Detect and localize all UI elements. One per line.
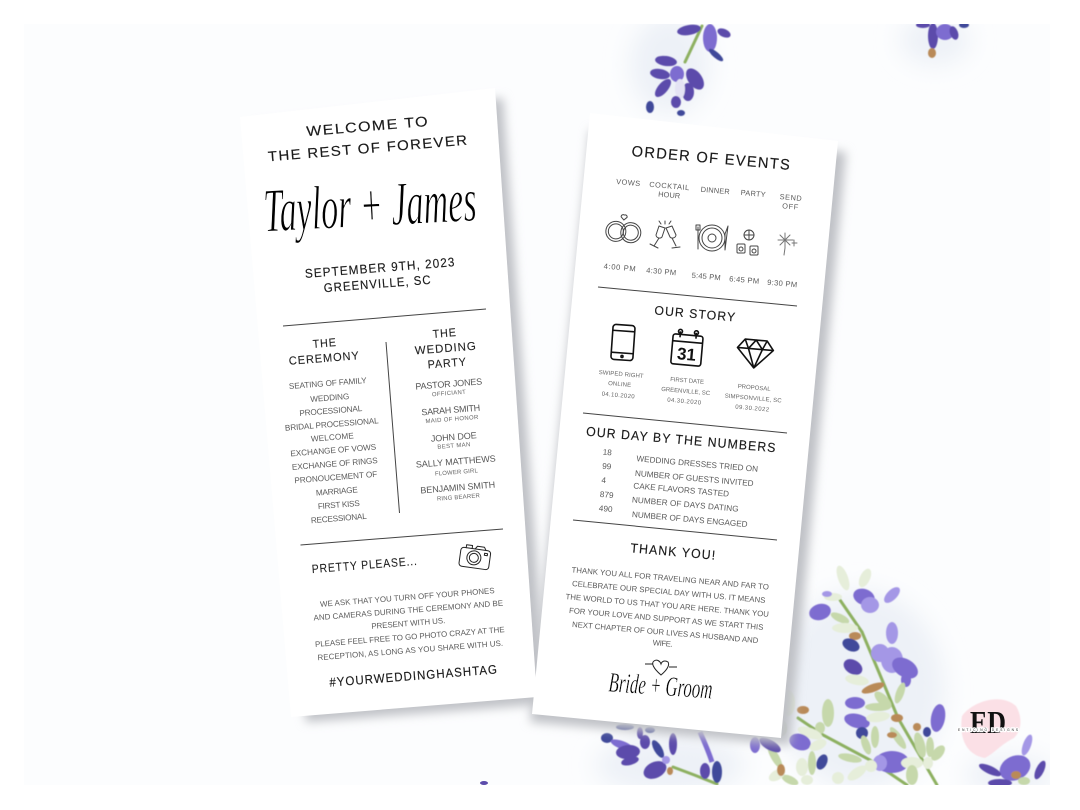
wedding party names: MAID OF HONOR — [425, 415, 479, 425]
ceremony heading: CEREMONY — [288, 350, 360, 368]
event labels: VOWS — [616, 177, 641, 188]
numbers list: NUMBER OF DAYS DATING — [632, 495, 739, 514]
event labels: PARTY — [740, 188, 766, 199]
welcome heading — [267, 113, 469, 164]
wedding party heading: PARTY — [427, 356, 467, 372]
wedding party names: SARAH SMITH — [421, 403, 481, 417]
ceremony schedule — [285, 376, 379, 525]
ceremony schedule: MARRIAGE — [316, 485, 359, 498]
date and place — [304, 255, 456, 295]
icon: champagne toast — [650, 221, 680, 248]
wedding party names: BENJAMIN SMITH — [420, 480, 496, 495]
ceremony schedule: EXCHANGE OF VOWS — [290, 443, 377, 458]
logo pink blob — [961, 699, 1020, 758]
ceremony schedule: SEATING OF FAMILY — [289, 376, 368, 391]
wedding party names: SALLY MATTHEWS — [415, 453, 496, 470]
hashtag: #YOURWEDDINGHASHTAG — [329, 662, 498, 690]
heading: thank you: THANK YOU! — [630, 540, 717, 563]
icon: camera — [459, 544, 491, 570]
ceremony schedule: EXCHANGE OF RINGS — [292, 456, 379, 472]
logo small caption: ENTICING DESIGNS — [958, 728, 1018, 732]
wedding party heading: WEDDING — [414, 341, 477, 357]
card sheet — [532, 113, 838, 738]
upper blossoms — [836, 566, 850, 590]
ceremony schedule: BRIDAL PROCESSIONAL — [285, 416, 379, 433]
lavender top left — [646, 23, 732, 116]
ceremony schedule: FIRST KISS — [318, 499, 361, 511]
event labels: COCKTAIL — [649, 180, 690, 192]
story captions: SIMPSONVILLE, SC — [724, 394, 782, 405]
request paragraph — [313, 586, 505, 662]
wedding party names: RING BEARER — [437, 493, 481, 503]
event times: 6:45 PM — [729, 274, 760, 286]
event labels: SEND — [779, 192, 802, 203]
ceremony heading — [288, 337, 360, 368]
heading: order of events: ORDER OF EVENTS — [631, 143, 792, 174]
ceremony schedule: WELCOME — [311, 431, 355, 444]
story captions — [598, 370, 782, 414]
event labels — [616, 177, 802, 212]
icon: heart flourish — [645, 660, 677, 675]
ceremony schedule: PROCESSIONAL — [299, 404, 363, 418]
wedding party names: PASTOR JONES — [415, 376, 483, 392]
request paragraph: AND CAMERAS DURING THE CEREMONY AND BE — [313, 599, 503, 622]
wedding party names: OFFICIANT — [432, 390, 466, 398]
welcome heading: WELCOME TO — [306, 113, 430, 139]
icon: phone — [611, 324, 635, 361]
wedding party heading — [414, 327, 477, 372]
lower left blossoms — [822, 699, 834, 727]
numbers list: NUMBER OF GUESTS INVITED — [635, 469, 754, 488]
wedding party names: JOHN DOE — [430, 430, 477, 444]
story captions: PROPOSAL — [737, 384, 771, 393]
numbers list: 490 — [599, 504, 613, 514]
flower soft shadows — [595, 15, 1055, 795]
panel: left card — [240, 88, 537, 717]
ceremony schedule: WEDDING — [310, 392, 350, 404]
ceremony heading: THE — [312, 337, 337, 351]
ceremony schedule: RECESSIONAL — [311, 512, 368, 525]
lavender fragment under left card — [480, 781, 488, 785]
thank you message: WIFE. — [652, 638, 673, 649]
request paragraph: PRESENT WITH US. — [371, 616, 446, 631]
shadow: right card — [530, 130, 846, 745]
story captions: ONLINE — [608, 381, 631, 389]
icon: dinner plate — [696, 225, 728, 251]
icon: fireworks — [778, 233, 797, 255]
ceremony schedule: PRONOUCEMENT OF — [294, 470, 378, 485]
lavender bottom left — [601, 724, 760, 784]
wedding party heading: THE — [432, 327, 457, 341]
wedding party names — [415, 376, 496, 503]
numbers list: 18 — [602, 448, 613, 457]
request paragraph: RECEPTION, AS LONG AS YOU SHARE WITH US. — [317, 639, 503, 662]
card sheet — [240, 88, 537, 717]
numbers list — [599, 448, 758, 529]
lavender main bouquet — [757, 564, 948, 787]
wedding party names: BEST MAN — [437, 442, 471, 451]
numbers list: WEDDING DRESSES TRIED ON — [636, 454, 758, 474]
story captions: 04.30.2020 — [667, 398, 702, 407]
numbers list: 879 — [600, 490, 614, 500]
event labels: DINNER — [700, 185, 730, 196]
thank you message: NEXT CHAPTER OF OUR LIVES AS HUSBAND AND — [572, 620, 759, 645]
event times: 9:30 PM — [767, 278, 798, 289]
heading: our story: OUR STORY — [654, 303, 737, 325]
icon: party — [737, 230, 758, 255]
thank you message: CELEBRATE OUR SPECIAL DAY WITH US. IT MEANS — [572, 579, 766, 605]
icon: calendar — [671, 329, 704, 366]
right side blossoms — [930, 704, 946, 732]
event times: 4:30 PM — [646, 266, 677, 277]
heading: our day by the numbers: OUR DAY BY THE NUMBERS — [586, 424, 777, 455]
event labels: HOUR — [658, 190, 681, 200]
icon: diamond — [736, 338, 774, 370]
lower centre blossoms — [875, 751, 909, 773]
shadow: left card — [256, 98, 547, 722]
lavender bottom right — [977, 733, 1048, 787]
date and place: SEPTEMBER 9TH, 2023 — [304, 255, 456, 281]
date and place: GREENVILLE, SC — [323, 273, 432, 295]
event times: 4:00 PM — [603, 262, 636, 273]
thank you message: FOR YOUR LOVE AND SUPPORT AS WE START THIS — [569, 606, 764, 632]
numbers list: 99 — [602, 462, 612, 471]
lavender sprigs — [480, 15, 1055, 795]
panel: right card — [532, 113, 838, 738]
story captions: FIRST DATE — [670, 377, 704, 386]
story captions: 09.30.2022 — [735, 405, 770, 414]
event labels: OFF — [782, 201, 799, 212]
logo — [958, 699, 1020, 758]
welcome heading: THE REST OF FOREVER — [267, 132, 469, 164]
thank you message: THE WORLD TO US THAT YOU ARE HERE. THANK YOU — [565, 592, 770, 619]
wedding party names: FLOWER GIRL — [435, 468, 479, 478]
icon: wedding rings — [605, 213, 642, 244]
thank you message — [565, 565, 770, 649]
lavender top right — [916, 22, 969, 58]
event times: 5:45 PM — [691, 271, 721, 282]
request paragraph: PLEASE FEEL FREE TO GO PHOTO CRAZY AT THE — [315, 625, 505, 649]
numbers list: 4 — [601, 476, 607, 485]
signature: Bride + Groom — [608, 667, 714, 706]
pretty please heading: PRETTY PLEASE... — [311, 554, 418, 576]
thank you message: THANK YOU ALL FOR TRAVELING NEAR AND FAR TO — [571, 565, 769, 592]
event times — [603, 262, 798, 289]
numbers list: NUMBER OF DAYS ENGAGED — [632, 510, 748, 529]
couple names: Taylor + James — [262, 167, 478, 246]
icon: calendar: 31 — [676, 344, 697, 365]
numbers list: CAKE FLAVORS TASTED — [633, 481, 730, 499]
request paragraph: WE ASK THAT YOU TURN OFF YOUR PHONES — [320, 586, 495, 609]
story captions: GREENVILLE, SC — [661, 387, 711, 397]
logo monogram: ED — [970, 704, 1006, 740]
story captions: 04.10.2020 — [601, 392, 635, 400]
story captions: SWIPED RIGHT — [598, 370, 644, 380]
